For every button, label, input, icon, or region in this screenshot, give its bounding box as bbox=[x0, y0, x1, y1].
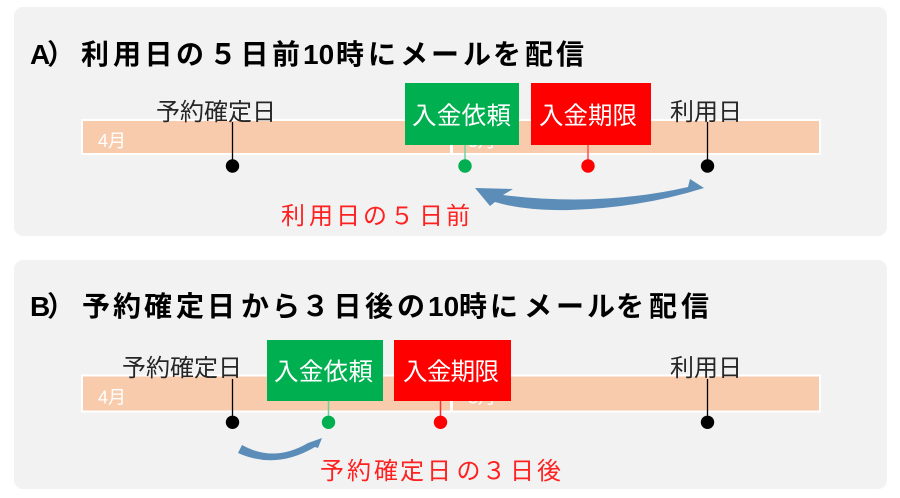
heading A: 10 bbox=[303, 39, 334, 70]
label: usage date: 利用日 bbox=[670, 99, 742, 126]
heading A: 利用日の５日前 bbox=[81, 39, 300, 70]
heading B: B） bbox=[30, 291, 75, 322]
heading A: 時にメールを配信 bbox=[336, 39, 584, 70]
heading B: 10 bbox=[428, 291, 459, 322]
marker: usage date bbox=[701, 122, 714, 173]
timeline bar: May bbox=[452, 120, 820, 154]
label: usage date: 利用日 bbox=[670, 355, 742, 382]
marker: payment deadline bbox=[434, 400, 447, 429]
panel: B bbox=[14, 260, 887, 489]
marker: booking date bbox=[226, 122, 239, 173]
marker: usage date bbox=[701, 379, 714, 429]
timeline bar: May bbox=[452, 376, 820, 412]
caption A: 利用日の５日前 bbox=[281, 203, 470, 230]
timeline bar: April bbox=[82, 120, 451, 154]
box: payment request bbox=[405, 83, 519, 145]
label: booking date: 予約確定日 bbox=[122, 355, 242, 382]
arrow: forward from booking date bbox=[238, 438, 322, 460]
box: payment request: 入金依頼 bbox=[412, 102, 511, 130]
heading B: 予約確定日から３日後の bbox=[82, 291, 425, 322]
timeline bar: April: 4月 bbox=[98, 131, 126, 151]
box: payment deadline bbox=[531, 83, 651, 145]
timeline bar: May: 5月 bbox=[468, 388, 496, 408]
heading A: A） bbox=[30, 39, 75, 70]
box: payment deadline: 入金期限 bbox=[539, 102, 637, 130]
label: booking date: 予約確定日 bbox=[156, 99, 276, 126]
box: payment deadline: 入金期限 bbox=[403, 358, 499, 386]
arrow: back from usage date bbox=[475, 179, 704, 210]
marker: payment request bbox=[458, 140, 472, 173]
box: payment deadline bbox=[394, 340, 511, 401]
timeline bar: April: 4月 bbox=[98, 388, 126, 408]
caption B: 予約確定日の３日後 bbox=[320, 458, 561, 485]
box: payment request: 入金依頼 bbox=[274, 358, 373, 386]
marker: payment deadline bbox=[581, 140, 595, 173]
timeline bar: May: 5月 bbox=[468, 131, 496, 151]
marker: booking date bbox=[226, 379, 239, 429]
marker: payment request bbox=[322, 400, 335, 429]
timeline bar: April bbox=[82, 376, 451, 412]
heading B: 時にメールを配信 bbox=[459, 291, 709, 322]
panel: A bbox=[14, 7, 887, 236]
box: payment request bbox=[267, 340, 383, 401]
